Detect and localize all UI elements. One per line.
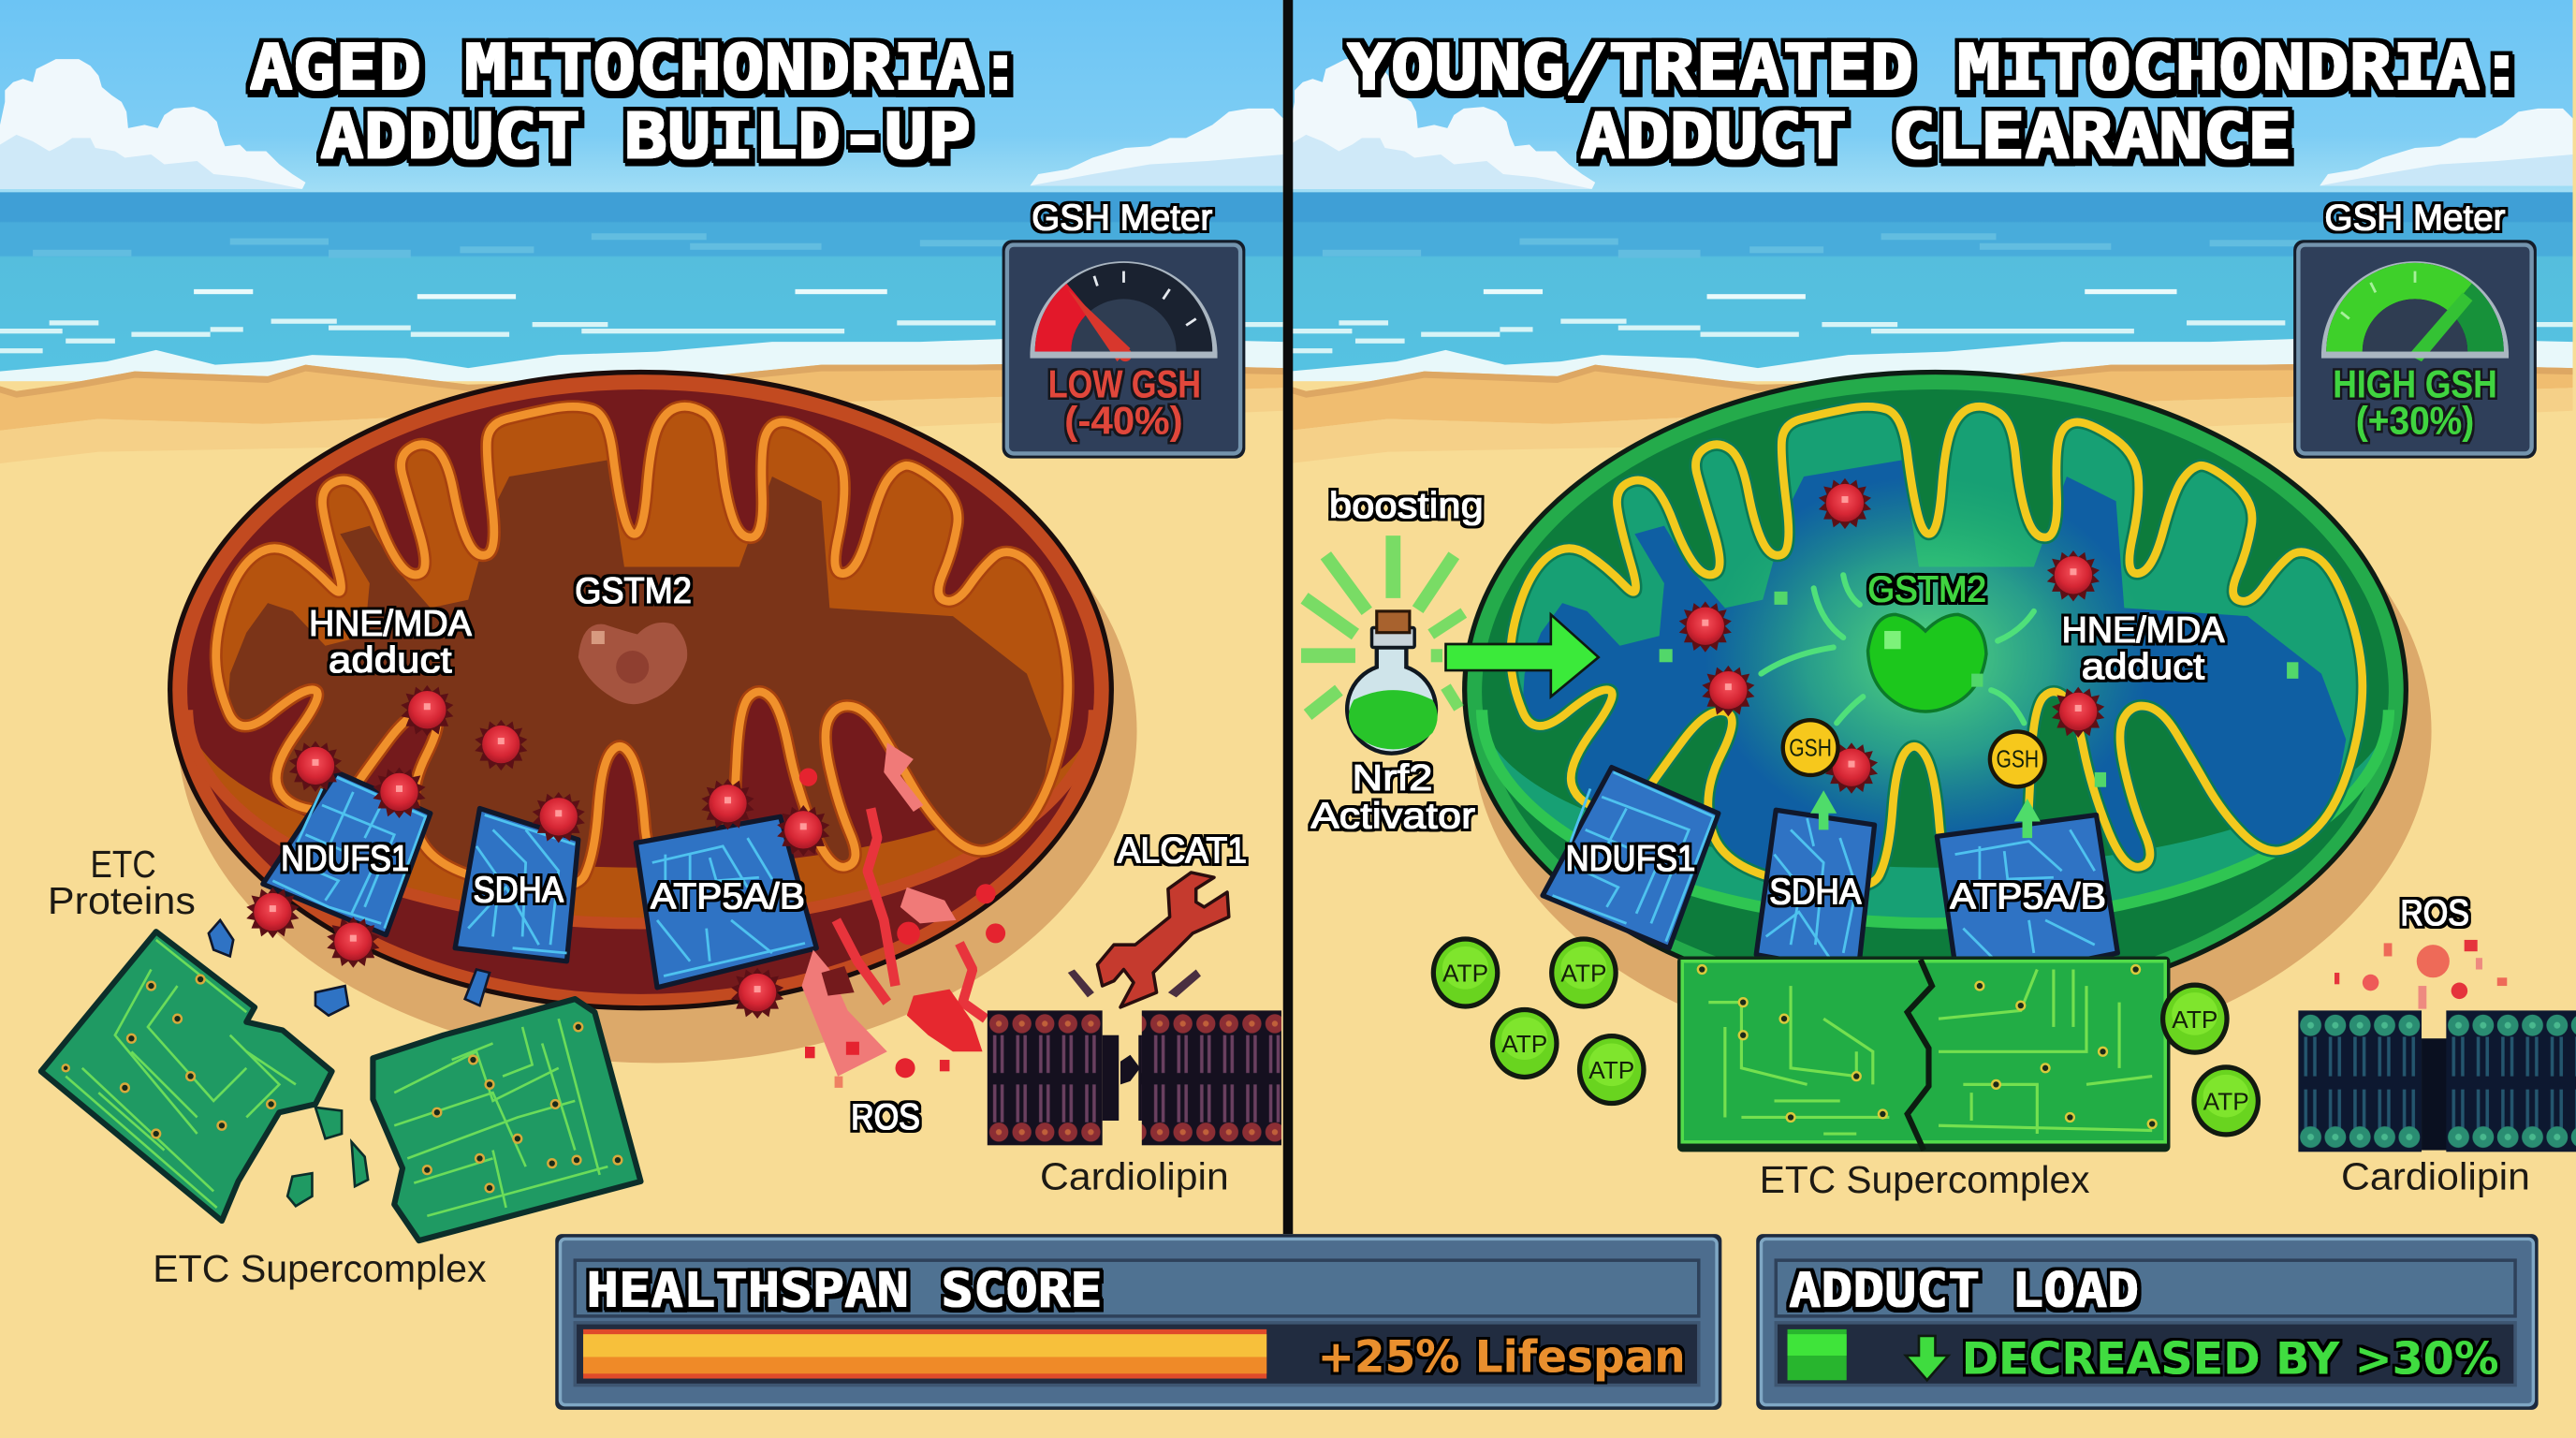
GSH coin 2	[1988, 729, 2047, 788]
label: ROS aged: ROS	[851, 1097, 920, 1137]
GSH coin 1	[1781, 718, 1840, 777]
wrench icon: ALCAT1	[1068, 873, 1229, 1007]
center divider	[1283, 0, 1293, 1234]
label: ATP5A/B young: ATP5A/B	[1950, 877, 2106, 917]
ROS burst, aged	[799, 742, 1005, 1088]
label: GSH Meter young: GSH Meter	[2324, 198, 2506, 239]
GSH meter: low: (-40%)	[1064, 398, 1183, 442]
boost arrow into mitochondrion	[1445, 614, 1599, 697]
label: aged HNE/MDA adduct: adduct	[329, 640, 452, 681]
Nrf2 activator potion flask	[1347, 611, 1438, 754]
label: ETC Proteins: Proteins	[48, 879, 196, 922]
red adducts, aged	[246, 685, 829, 1019]
young chip: NDUFS1	[1543, 768, 1719, 948]
broken ETC supercomplex: right piece	[373, 999, 640, 1240]
board fragments	[287, 1108, 368, 1206]
label: ALCAT1: ALCAT1	[1117, 830, 1247, 871]
young mitochondrion body	[1462, 370, 2432, 1064]
label: Nrf2 Activator: Activator	[1311, 797, 1475, 837]
label: ROS young: ROS	[2400, 893, 2469, 933]
label: NDUFS1 young: NDUFS1	[1566, 839, 1695, 879]
label: boosting: boosting	[1329, 486, 1484, 526]
red adducts, young	[1679, 478, 2104, 794]
GSH meter: low	[1003, 240, 1245, 459]
cardiolipin membrane, damaged	[988, 1010, 1281, 1145]
label: ETC Proteins: ETC	[91, 843, 156, 886]
label: GSTM2 active: GSTM2	[1868, 569, 1986, 609]
up arrows from chips	[1810, 790, 2041, 838]
aged chip: ATP5A/B	[636, 816, 816, 988]
GSH coin 2: GSH	[1996, 745, 2039, 773]
label: aged HNE/MDA adduct: HNE/MDA	[309, 604, 472, 644]
label: NDUFS1 aged: NDUFS1	[281, 839, 409, 879]
title: young/treated mitochondria	[1347, 31, 2524, 172]
heading: adduct load: ADDUCT LOAD	[1789, 1263, 2139, 1318]
label: aged GSTM2: GSTM2	[575, 571, 692, 611]
aged mitochondrion body	[168, 370, 1137, 1064]
label: SDHA aged: SDHA	[473, 871, 564, 911]
heading: healthspan score: HEALTHSPAN SCORE	[587, 1263, 1103, 1318]
label: ETC Proteins	[48, 843, 196, 922]
ROS, reduced	[2334, 940, 2507, 1009]
GSH meter: high: HIGH GSH	[2333, 362, 2497, 406]
GSH meter: low: LOW GSH	[1048, 362, 1201, 406]
label: ETC Supercomplex young: ETC Supercomplex	[1760, 1158, 2089, 1201]
background: right beach scene	[1290, 0, 2572, 1438]
value: decreased by over 30 percent: DECREASED BY >30%	[1962, 1333, 2499, 1385]
label: ETC Supercomplex aged: ETC Supercomplex	[153, 1247, 487, 1290]
panel: adduct load	[1756, 1234, 2539, 1410]
label: ATP5A/B aged: ATP5A/B	[651, 877, 805, 917]
active GSTM2 enzyme	[1868, 614, 1986, 712]
label: Cardiolipin young: Cardiolipin	[2341, 1155, 2530, 1198]
intact ETC supercomplex board	[1677, 956, 2170, 1152]
down arrow	[1906, 1336, 1949, 1380]
label: Nrf2 Activator: Nrf2	[1352, 758, 1432, 799]
title: young/treated mitochondria: YOUNG/TREATED MITOCHONDRIA:	[1347, 31, 2524, 104]
protein fragments	[209, 920, 490, 1016]
aged chip: SDHA	[455, 809, 578, 961]
cardiolipin membrane, intact	[2298, 1010, 2576, 1152]
title: aged mitochondria: ADDUCT BUILD-UP	[320, 99, 971, 172]
aged chip: NDUFS1	[263, 772, 431, 935]
label: Cardiolipin aged: Cardiolipin	[1040, 1155, 1229, 1198]
adduct load remaining bar	[1788, 1329, 1847, 1380]
label: GSH Meter aged: GSH Meter	[1032, 198, 1212, 239]
small green arrows and particles around GSTM2	[1660, 575, 2298, 787]
young chip: ATP5A/B	[1937, 815, 2117, 977]
title: aged mitochondria: AGED MITOCHONDRIA:	[250, 31, 1022, 104]
label: SDHA young: SDHA	[1769, 872, 1862, 912]
young chip: SDHA	[1756, 810, 1875, 973]
value: lifespan: +25% Lifespan	[1318, 1332, 1686, 1384]
label: aged HNE/MDA adduct	[309, 604, 472, 681]
label: HNE/MDA adduct young: HNE/MDA	[2062, 610, 2225, 651]
panel: healthspan score	[555, 1234, 1721, 1410]
broken ETC supercomplex: left piece	[41, 932, 332, 1221]
title: aged mitochondria	[250, 31, 1022, 172]
GSH meter: high	[2293, 240, 2537, 459]
GSH meter: high: (+30%)	[2356, 398, 2474, 442]
label: HNE/MDA adduct young	[2062, 610, 2225, 687]
Nrf2 activator rays	[1301, 536, 1464, 714]
healthspan progress bar	[583, 1329, 1266, 1379]
aged GSTM2 enzyme	[578, 623, 687, 704]
title: young/treated mitochondria: ADDUCT CLEARANCE	[1580, 99, 2291, 172]
ATP coins	[1431, 936, 2261, 1137]
label: Nrf2 Activator	[1311, 758, 1475, 837]
GSH coin 1: GSH	[1789, 733, 1832, 761]
background: left beach scene	[0, 0, 1283, 1438]
label: HNE/MDA adduct young: adduct	[2082, 647, 2205, 687]
